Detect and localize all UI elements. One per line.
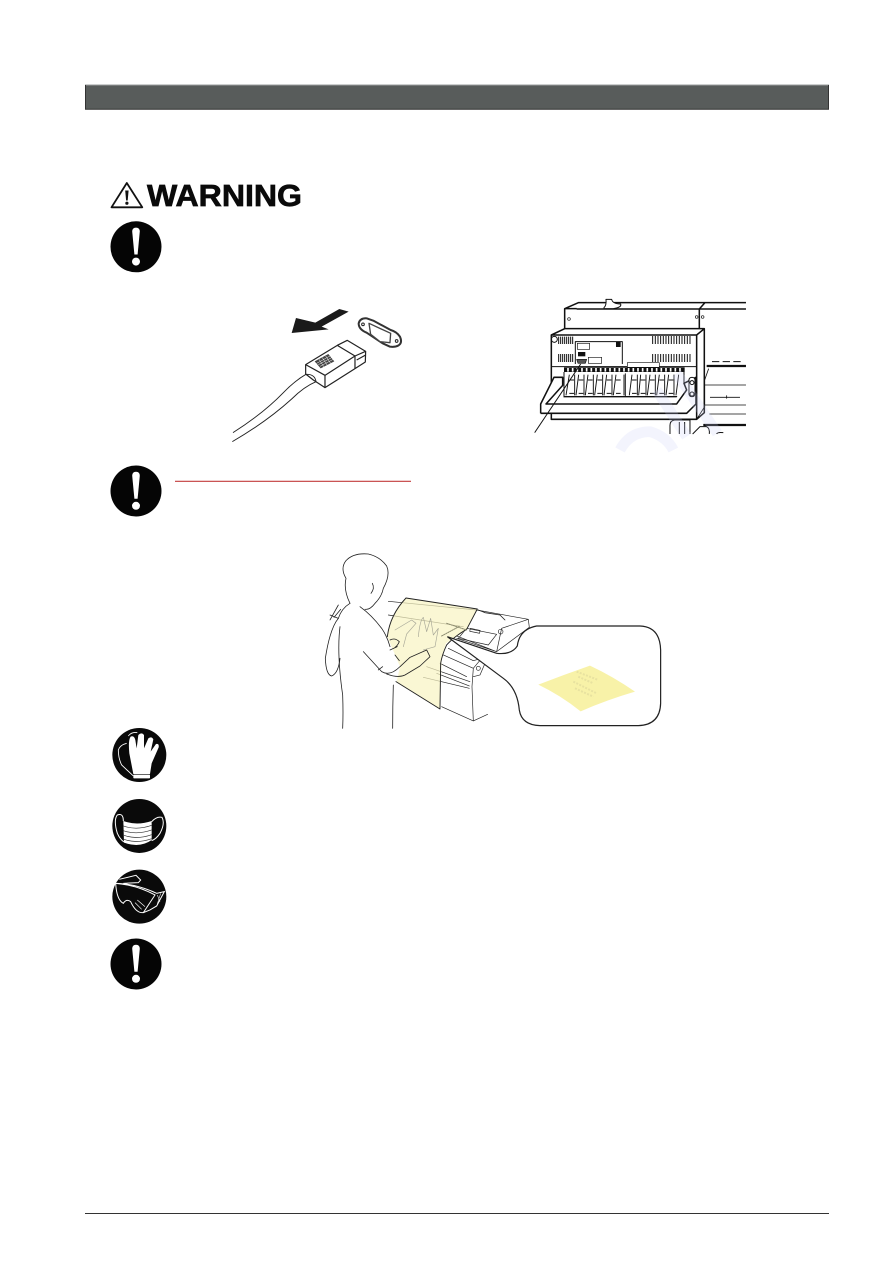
main panel <box>551 329 704 419</box>
watermark fragment <box>620 373 717 450</box>
arrow <box>292 309 349 333</box>
vents <box>559 336 690 362</box>
illustration: operator touching media <box>325 554 529 728</box>
icon: safety goggles <box>112 870 166 924</box>
side machinery <box>707 362 746 369</box>
front flap <box>541 377 696 413</box>
red underline <box>175 480 411 482</box>
plug body <box>306 340 366 388</box>
callout: magnified media sheet <box>447 626 661 726</box>
leader line <box>535 364 581 433</box>
icon: mandatory exclamation 1 <box>110 221 162 272</box>
warning heading: WARNING <box>147 178 302 213</box>
ink slots <box>564 367 685 372</box>
icon: mandatory exclamation 2 <box>110 466 162 516</box>
upper housing <box>565 303 746 328</box>
cable <box>233 374 306 433</box>
media sheet <box>387 598 477 709</box>
connector plate <box>575 342 622 364</box>
person <box>343 554 388 609</box>
hands through media <box>395 617 438 650</box>
printer <box>388 601 529 652</box>
illustration: printer rear panel <box>535 299 746 450</box>
icon: mandatory exclamation 3 <box>110 938 162 990</box>
inlet socket <box>359 318 401 347</box>
illustration: power plug being unplugged <box>232 309 401 442</box>
footer rule <box>85 1212 829 1214</box>
icon: face mask <box>112 799 166 853</box>
header bar <box>85 85 829 110</box>
icon: gloves <box>112 728 166 782</box>
